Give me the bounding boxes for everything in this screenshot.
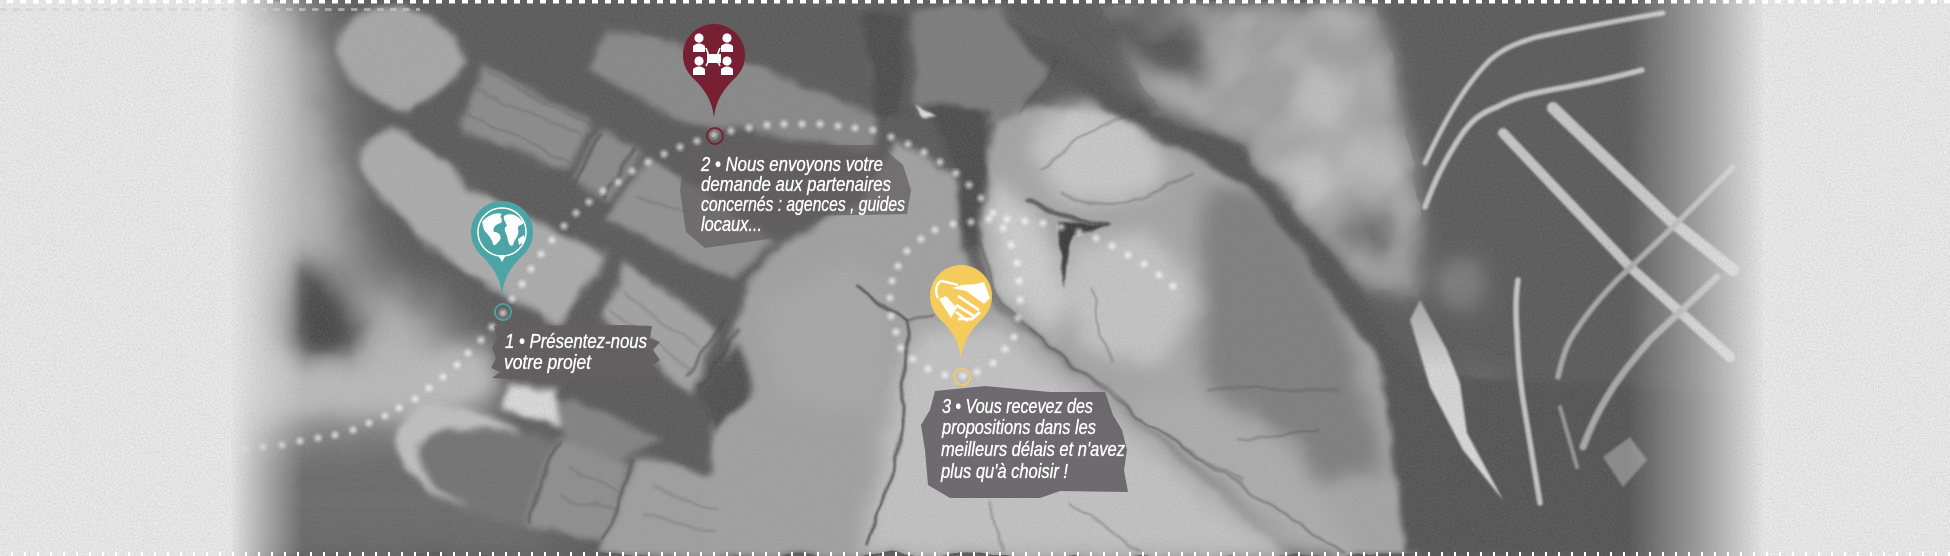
sleeve stripes	[1425, 13, 1733, 503]
dotted route	[239, 118, 1179, 455]
small bright fold near thumb	[917, 104, 938, 118]
step 2: brush caption: demande aux partenaires	[701, 174, 891, 196]
palm	[700, 140, 1290, 556]
step 1: brush caption	[491, 325, 660, 381]
step 2: brush caption: concernés : agences , guides	[701, 194, 905, 216]
dark wedge crease in palm	[1060, 222, 1105, 290]
photo: hand in black and white	[234, 0, 1758, 556]
faint perforation row	[0, 8, 420, 11]
step 3: brush caption: plus qu'à choisir !	[940, 461, 1068, 483]
step 2: brush caption: 2 • Nous envoyons votre	[700, 154, 883, 176]
step 3: brush caption: propositions dans les	[941, 417, 1096, 439]
step 2: brush caption	[680, 145, 911, 248]
step 3: handshake pin	[930, 265, 992, 385]
step 3: brush caption	[921, 386, 1128, 498]
perforated bottom edge	[0, 552, 1950, 556]
step 3: brush caption: 3 • Vous recevez des	[942, 396, 1093, 418]
step 1: globe pin	[471, 201, 533, 320]
hand shadow band	[640, 0, 1534, 555]
step 3: brush caption: meilleurs délais et n'avez	[941, 439, 1125, 461]
white cuff streak	[1410, 300, 1503, 500]
palm creases	[470, 60, 1342, 552]
perforated top edge	[0, 0, 1950, 4]
fingers	[338, 4, 1420, 556]
blotchy background texture	[1102, 2, 1421, 298]
step 1: brush caption: 1 • Présentez-nous	[505, 331, 647, 353]
step 2: network pin	[683, 24, 745, 144]
step 1: brush caption: votre projet	[504, 352, 592, 374]
step 2: brush caption: locaux...	[701, 214, 762, 236]
